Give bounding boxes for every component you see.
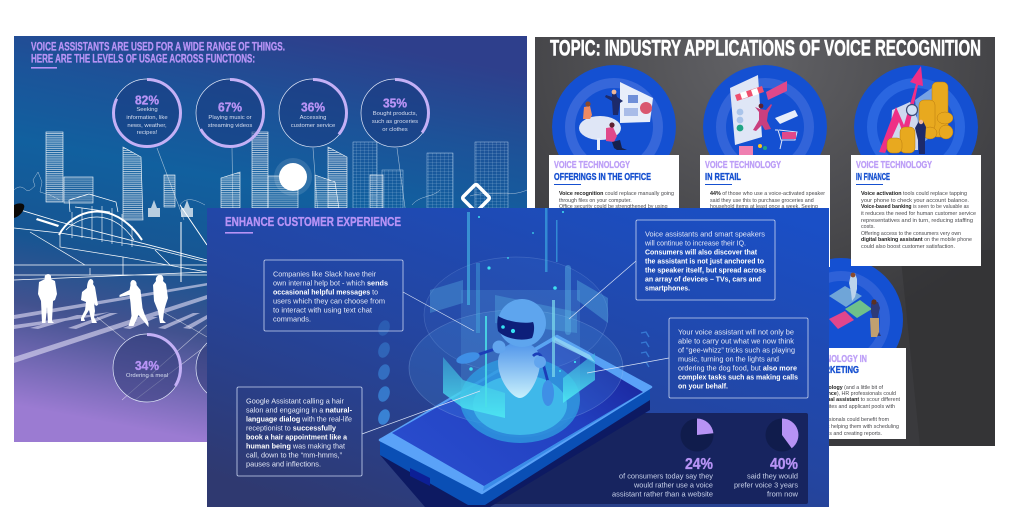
pie chart and stat: 24 percent [612,418,714,498]
callout: gee-whizz tricks [669,318,808,398]
connector lines from callouts [362,261,669,434]
illustration: phone with robot assistant [376,208,651,507]
pie chart and stat: 24 percent: would rather use a voice [633,482,713,490]
stats backdrop [460,413,808,504]
card: voice technology in HR and marketing [776,348,906,439]
ring: 36 percent customer service: 36% [301,100,325,114]
panel: industry applications of voice recognition [535,36,995,446]
heading: voice assistants range of things: HERE ARE THE LEVELS OF USAGE ACROSS FUNCTIONS: [31,52,255,66]
card: voice technology in finance: digital banking assistant on the mobile phone [861,237,972,243]
bridge and road line art [14,194,207,282]
ring: 36 percent customer service: Accessing [300,115,326,121]
card: voice technology in finance: it reduces the need for human customer service [861,211,976,217]
callout: Google Assistant hair salon: human being was making that [246,442,345,450]
pie chart and stat: 40 percent: 40% [770,456,798,473]
card: voice technology in HR and marketing: use a virtual assistant to scour different [804,397,901,403]
ring: 82 percent seeking information [113,79,181,147]
ring: 67 percent music [196,79,264,147]
icon: HR and marketing puzzle illustration [779,258,903,382]
ring: 34 percent ordering a meal: Ordering a meal [126,373,168,379]
card: voice technology in retail: said they use this to purchase groceries and [710,198,814,204]
card: voice technology in finance: could also boost customer satisfaction. [861,244,955,250]
callout: Google Assistant hair salon: call, down to the “mm-hmms,” [246,450,343,460]
icon: office meeting illustration [552,65,676,155]
card: voice technology in finance: Voice-based banking is seen to be valuable as [861,204,969,210]
card: voice technology in HR and marketing: job websites and applicant pools with [807,404,895,410]
card: voice technology in HR and marketing: Sales professionals could benefit from [799,417,890,423]
callout: gee-whizz tricks: of “gee-whizz” tricks such as playing [678,346,795,354]
callout: Slack help bot: Companies like Slack have their [273,270,377,278]
card: voice technology in finance: VOICE TECHNOLOGY [856,160,932,171]
callout: gee-whizz tricks: complex tasks such as making calls [678,372,798,382]
card: voice technology in retail: 44% of those who use a voice-activated speaker [710,191,825,197]
callout: smart speakers IQ: an array of devices – TVs, cars and [645,274,761,284]
callout: Slack help bot [264,260,403,331]
pie chart and stat: 40 percent: prefer voice 3 years [734,482,799,490]
ring: 35 percent bought products: such as groceries [372,119,418,125]
card: voice technology in finance: your phone to check your account balance. [861,198,969,204]
card: voice technology in retail: VOICE TECHNOLOGY [705,160,781,171]
card: voice technology in HR and marketing: artificial intelligence), HR professionals could [786,391,896,397]
partial ring hidden behind front panel [196,334,264,402]
card: voice technology in HR and marketing: meetings and creating reports. [810,431,882,437]
ring: 67 percent music: 67% [218,100,242,114]
ring: 35 percent bought products: or clothes [382,127,408,133]
card: voice technology offerings in the office: VOICE TECHNOLOGY [554,160,630,171]
panel: voice assistant usage levels [14,36,527,442]
callout: smart speakers IQ: Consumers will also discover that [645,248,758,256]
callout: gee-whizz tricks: ordering the dog food, but also more [678,364,797,372]
icon: retail shopping illustration [703,65,827,155]
callout: Slack help bot: own internal help bot - which sends [273,278,388,288]
icon: finance growth illustration [854,65,978,155]
ring: 67 percent music: streaming videos [208,123,252,129]
callout: smart speakers IQ: will continue to increase their IQ. [644,238,746,248]
ring: 67 percent music: Playing music or [208,115,252,121]
callout: Slack help bot: commands. [273,314,311,324]
callout: Google Assistant hair salon: pauses and inflections. [246,460,321,468]
callout: Google Assistant hair salon: Google Assistant calling a hair [246,396,345,406]
ring: 82 percent seeking information: information, like [126,115,168,121]
card: voice technology in finance: representatives and in turn, reducing staffing [861,218,973,224]
callout: Slack help bot: occasional helpful messages to [273,288,378,296]
ring: 35 percent bought products: 35% [383,96,407,110]
pie chart and stat: 24 percent: of consumers today say they [619,474,714,480]
pie chart and stat: 24 percent: 24% [685,456,713,473]
pie chart and stat: 40 percent: from now [767,492,799,498]
ring: 82 percent seeking information: news, weather, [127,123,167,129]
card: voice technology in retail [700,155,830,267]
callout: smart speakers IQ [636,220,775,300]
callout: Slack help bot: to interact with using text chat [273,306,372,314]
callout: Google Assistant hair salon: language dialog with the real-life [246,414,352,424]
ring: 34 percent ordering a meal [113,334,181,402]
pie chart and stat: 40 percent [734,418,799,498]
robot [455,299,554,406]
card: voice technology in HR and marketing: VOICE TECHNOLOGY IN [781,354,867,365]
ring: 82 percent seeking information: 82% [135,92,159,108]
callout: gee-whizz tricks: able to carry out what we now think [678,336,794,346]
callout: Google Assistant hair salon: salon and engaging in a natural- [246,406,353,414]
ring: 34 percent ordering a meal: 34% [135,358,159,373]
card: voice technology in finance: Offering access to the consumers very own [861,231,961,237]
city skyline illustration [14,132,527,400]
pie chart and stat: 24 percent: assistant rather than a website [612,492,713,498]
callout: Google Assistant hair salon: book a hair appointment like a [246,432,348,442]
heading: voice assistants range of things [31,40,285,69]
card: voice technology offerings in the office: Office security could be strengthened by using [559,204,668,210]
ring: 36 percent customer service [279,79,347,147]
ring: 35 percent bought products: Bought products, [373,111,418,117]
ring: 35 percent bought products [361,79,429,147]
callout: smart speakers IQ: smartphones. [645,284,690,292]
card: voice technology in retail: household items at least once a week. Seeing [710,204,818,210]
card: voice technology offerings in the office: through files on your computer. [559,198,632,204]
heading: voice assistants range of things: VOICE ASSISTANTS ARE USED FOR A WIDE RANGE OF THINGS. [31,40,285,54]
callout: smart speakers IQ: the speaker itself, but spread across [645,266,766,274]
card: voice technology in finance: costs. [861,224,875,230]
card: voice technology offerings in the office [549,155,679,267]
callout: gee-whizz tricks: on your behalf. [678,382,728,390]
callout: gee-whizz tricks: music, turning on the lights and [678,354,779,364]
callout: gee-whizz tricks: Your voice assistant will not only be [678,328,794,336]
silhouettes of four pedestrians [38,274,168,327]
card: voice technology in retail: IN RETAIL [705,172,741,183]
card: voice technology in HR and marketing: an assistant helping them with scheduling [801,424,899,430]
ring: 82 percent seeking information: Seeking [136,107,158,113]
card: voice technology offerings in the office: Voice recognition could replace manually going [559,191,674,197]
heading: enhance customer experience: ENHANCE CUSTOMER EXPERIENCE [225,214,401,229]
ring: 82 percent seeking information: recipes! [137,130,158,136]
card: voice technology in HR and marketing: With voice technology (and a little bit of [788,385,884,391]
panel: enhance customer experience [207,208,829,507]
callout: smart speakers IQ: Voice assistants and smart speakers [645,230,765,238]
pie chart and stat: 40 percent: said they would [747,474,798,480]
card: voice technology in finance [851,155,981,266]
card: voice technology in HR and marketing: HR AND MARKETING [781,365,859,376]
card: voice technology offerings in the office: OFFERINGS IN THE OFFICE [554,172,651,183]
card: voice technology in finance: Voice activation tools could replace tapping [861,191,967,197]
callout: Google Assistant hair salon [237,387,362,476]
callout: Slack help bot: users which they can choose from [273,296,385,306]
callout: Google Assistant hair salon: receptionist to successfully [246,424,336,432]
card: voice technology in finance: IN FINANCE [856,172,890,183]
callout: smart speakers IQ: the assistant is not just anchored to [645,256,765,266]
ring: 36 percent customer service: customer service [291,123,336,129]
